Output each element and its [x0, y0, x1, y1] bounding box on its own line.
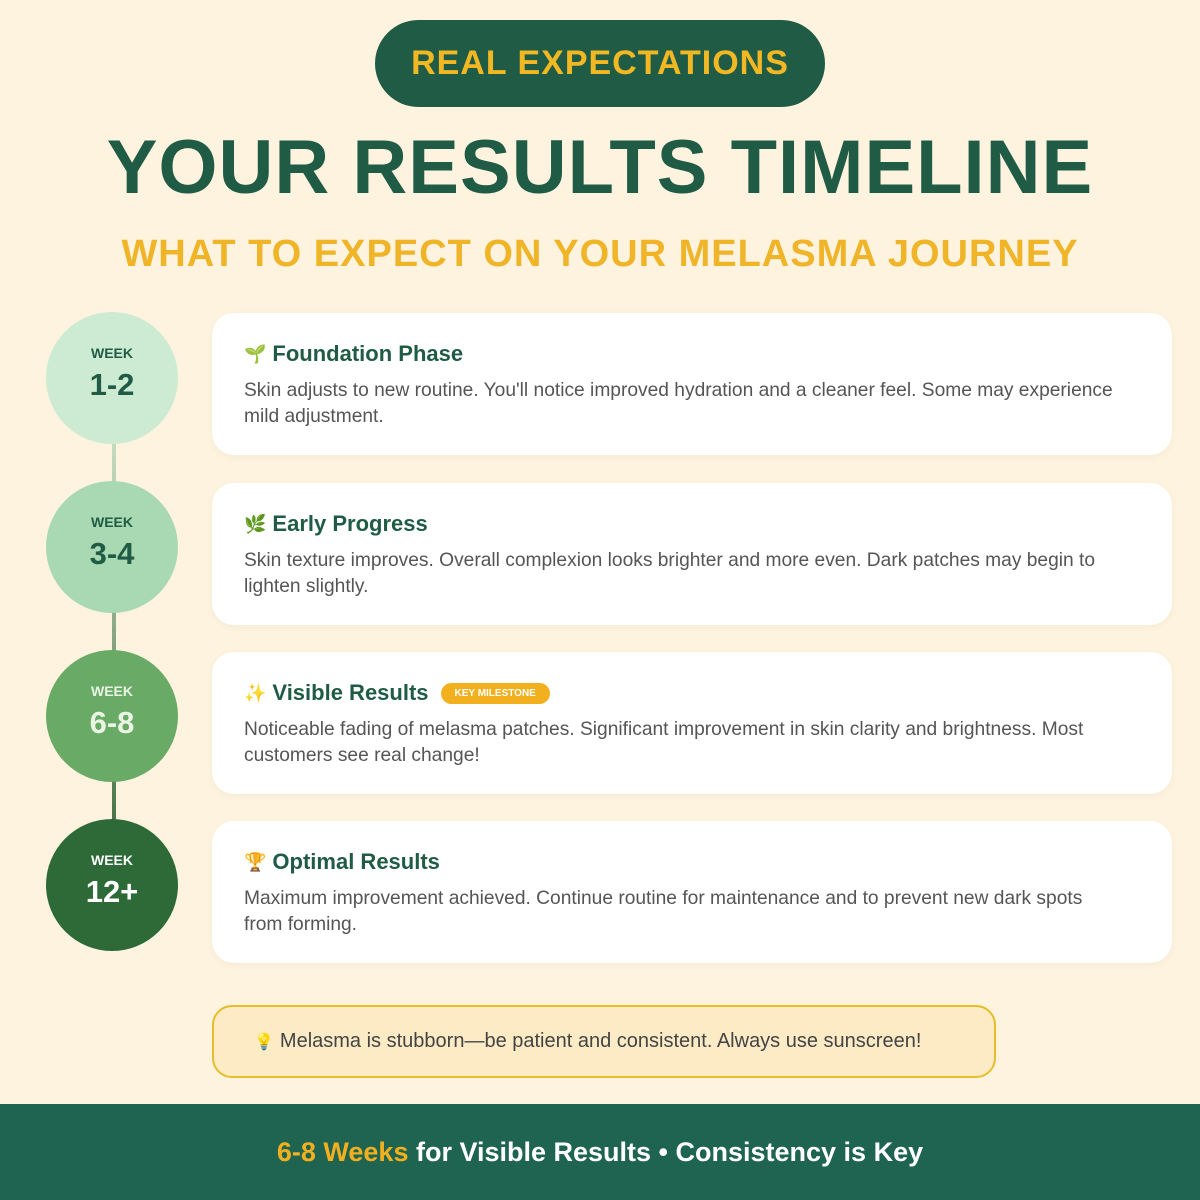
footer banner: [0, 1104, 1200, 1200]
footer banner: for Visible Results • Consistency is Key: [416, 1136, 923, 1166]
card title: Visible Results: [272, 680, 429, 705]
circle: week 6-8: [46, 650, 178, 782]
card: early progress: [212, 483, 1172, 625]
header pill: [375, 20, 825, 107]
circle: week 3-4: WEEK: [91, 514, 133, 530]
callout: [212, 1005, 996, 1078]
circle: week 6-8: 6-8: [90, 705, 134, 740]
card: optimal results: [212, 821, 1172, 963]
callout: 💡: [254, 1034, 274, 1050]
card title: Early Progress: [272, 511, 428, 536]
footer banner: 6-8 Weeks: [277, 1136, 408, 1166]
card title: 🌿: [244, 514, 266, 534]
card title: 🏆: [244, 852, 266, 872]
circle: week 3-4: 3-4: [90, 536, 134, 571]
circle: week 6-8: WEEK: [91, 683, 133, 699]
card text: Skin texture improves. Overall complexion looks brighter and more even. Dark patches may begin to: [244, 550, 1095, 571]
card text: [244, 550, 1095, 597]
subtitle: WHAT TO EXPECT ON YOUR MELASMA JOURNEY: [121, 233, 1079, 275]
circle: week 1-2: [46, 312, 178, 444]
card title: Foundation Phase: [272, 341, 463, 366]
card text: [244, 380, 1113, 427]
timeline connector: [112, 440, 116, 860]
circle: week 12+: WEEK: [91, 852, 133, 868]
title: YOUR RESULTS TIMELINE: [107, 125, 1093, 210]
circle: week 12+: [46, 819, 178, 951]
card text: lighten slightly.: [244, 576, 368, 597]
card title: KEY MILESTONE: [455, 688, 536, 698]
card text: [244, 888, 1082, 935]
card text: Maximum improvement achieved. Continue routine for maintenance and to prevent new dark spots: [244, 888, 1082, 909]
card text: from forming.: [244, 914, 357, 935]
card title: Optimal Results: [272, 849, 440, 874]
card title: [244, 680, 550, 705]
card text: Noticeable fading of melasma patches. Significant improvement in skin clarity and brightness. Most: [244, 719, 1083, 740]
circle: week 1-2: 1-2: [90, 367, 134, 402]
card text: mild adjustment.: [244, 406, 384, 427]
circle: week 12+: 12+: [86, 874, 138, 909]
card text: Skin adjusts to new routine. You'll notice improved hydration and a cleaner feel. Some may experience: [244, 380, 1113, 401]
card title: 🌱: [244, 344, 266, 364]
circle: week 3-4: [46, 481, 178, 613]
circle: week 1-2: WEEK: [91, 345, 133, 361]
card: visible results: [212, 652, 1172, 794]
callout: Melasma is stubborn—be patient and consistent. Always use sunscreen!: [280, 1030, 921, 1052]
card: foundation phase: [212, 313, 1172, 455]
header pill: REAL EXPECTATIONS: [411, 44, 789, 82]
card text: customers see real change!: [244, 745, 480, 766]
card text: [244, 719, 1084, 766]
card title: ✨: [244, 682, 266, 702]
